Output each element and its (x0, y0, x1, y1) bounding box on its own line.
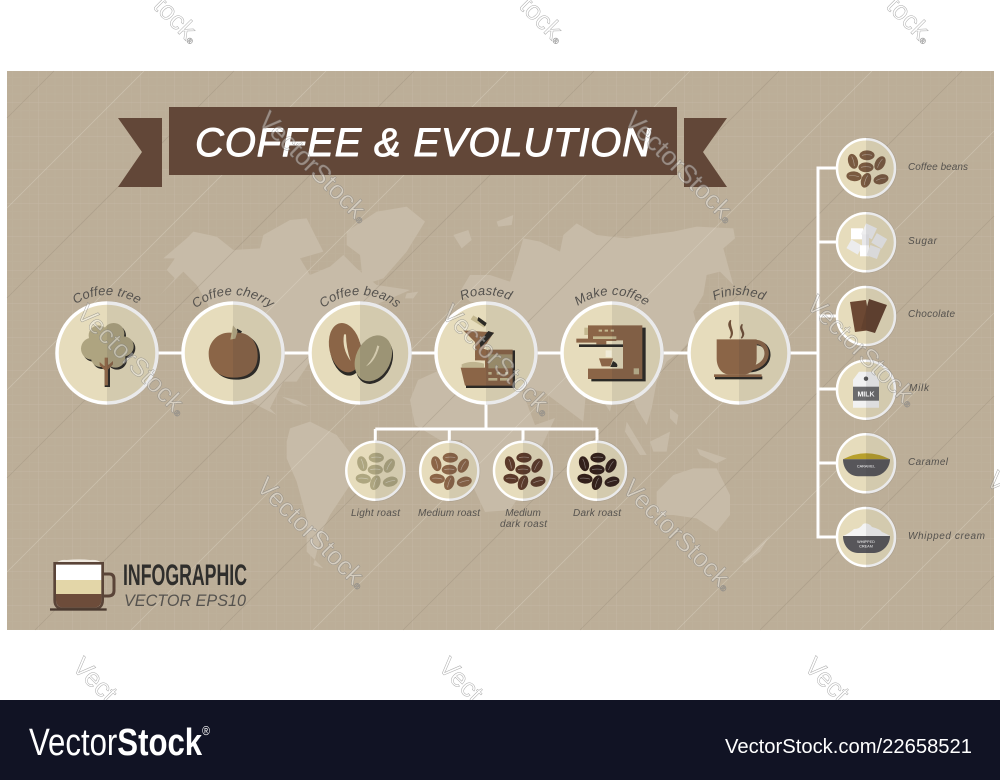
ingredient: coffee beans: Coffee beans (908, 162, 968, 173)
roast: light: Light roast (351, 508, 401, 519)
title ribbon (118, 107, 727, 187)
step: coffee beans: Coffee beans (320, 286, 400, 307)
step: coffee cherry: Coffee cherry (193, 286, 275, 307)
roast: dark (568, 440, 628, 519)
watermarks: VectorStock® (801, 289, 924, 413)
step: finished: Finished (713, 286, 768, 300)
step: coffee tree (55, 286, 159, 405)
ingredient: whipped cream: Whipped cream (908, 531, 985, 542)
roast: medium dark: dark roast (500, 519, 548, 530)
ingredient: whipped cream (837, 506, 985, 568)
step: coffee beans (308, 286, 412, 405)
icon: tree (81, 323, 135, 387)
icon: caramel bowl: CARAMEL (857, 464, 875, 468)
watermarks: VectorStock® (71, 298, 194, 422)
ingredient: chocolate: Chocolate (908, 309, 955, 320)
watermark diagonal lines (7, 71, 994, 630)
step: make coffee (560, 288, 664, 405)
ribbon left tail (118, 118, 162, 187)
ingredient: milk (837, 359, 930, 421)
icon: two beans (324, 320, 400, 390)
ribbon right tail (684, 118, 727, 187)
icon: sugar cubes (846, 223, 887, 259)
roast: dark: Dark roast (573, 508, 622, 519)
icon: roaster (461, 315, 515, 388)
ingredient: caramel: Caramel (908, 457, 949, 468)
icon: whipped cream bowl: WHIPPED (857, 540, 875, 544)
watermarks: VectorStock® (617, 473, 740, 597)
icon: coffee cup (714, 320, 768, 379)
step: finished (687, 286, 791, 405)
logo text: VECTOR EPS10 (124, 591, 247, 610)
connector lines (107, 168, 836, 537)
roast: medium (418, 440, 481, 519)
watermarks: VectorStock® (251, 471, 374, 595)
watermarks: Vect (799, 651, 856, 709)
world map (160, 207, 770, 568)
background panel (7, 71, 994, 630)
logo text: INFOGRAPHIC (123, 559, 247, 592)
icon: whipped cream bowl (843, 523, 890, 553)
watermarks: VectorStock® (619, 105, 742, 229)
step: roasted: Roasted (460, 287, 514, 300)
ingredient: sugar: Sugar (908, 236, 938, 247)
logo text (123, 559, 247, 610)
ribbon band (169, 107, 677, 175)
step: roasted (434, 287, 538, 405)
step: coffee tree: Coffee tree (74, 286, 140, 303)
watermarks: Vect (67, 651, 124, 709)
footer url: VectorStock.com/22658521 (725, 736, 972, 758)
icon: whipped cream bowl: CREAM (859, 544, 873, 548)
title: COFFEE & EVOLUTION (195, 121, 651, 165)
step: make coffee: Make coffee (575, 288, 648, 306)
footer bar (0, 700, 1000, 780)
roast: medium dark: Medium (505, 508, 541, 519)
roast: medium: Medium roast (418, 508, 481, 519)
icon: espresso machine (576, 325, 646, 381)
watermarks: VectorStock® (253, 105, 376, 229)
icon: cherry (209, 325, 260, 380)
footer logo: VectorStock (29, 722, 221, 764)
footer logo: ® (202, 723, 210, 738)
logo: infographic cup (50, 559, 114, 611)
ingredient: chocolate (837, 285, 955, 347)
step: coffee cherry (181, 286, 285, 405)
ingredient: coffee beans (837, 137, 968, 199)
ingredient: caramel (837, 432, 949, 494)
icon: chocolate bars (850, 299, 887, 333)
watermarks: VectorStock® (436, 298, 559, 422)
roast: medium dark (494, 440, 554, 530)
roast: light (346, 440, 406, 519)
ingredient: milk: Milk (909, 383, 930, 394)
icon: milk jug: MILK (857, 392, 875, 399)
watermarks: Vect (433, 651, 490, 709)
ingredient: sugar (837, 211, 938, 273)
